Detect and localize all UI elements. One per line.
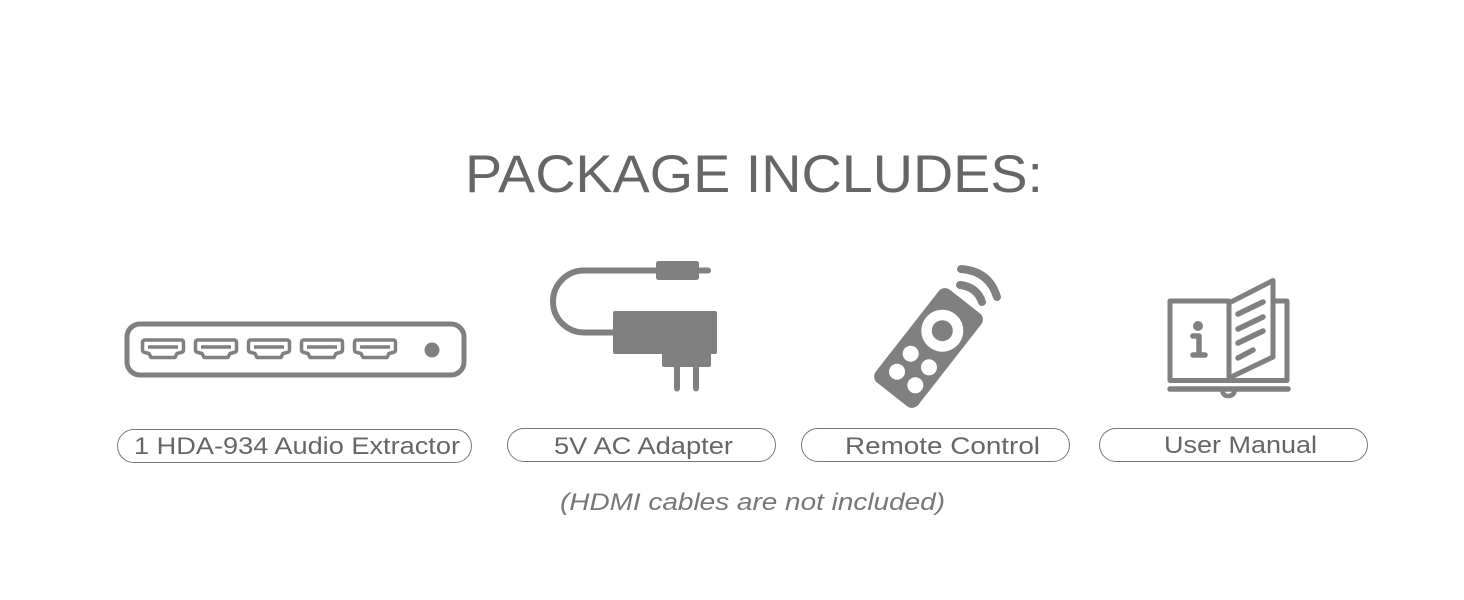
title: PACKAGE INCLUDES: bbox=[465, 145, 1043, 204]
label: remote control bbox=[802, 428, 1070, 462]
icon: audio extractor bbox=[127, 324, 464, 375]
icon: AC adapter bbox=[553, 261, 717, 388]
label: AC adapter bbox=[508, 428, 776, 462]
label: audio extractor: 1 HDA-934 Audio Extractor bbox=[134, 433, 460, 460]
label: remote control: Remote Control bbox=[845, 433, 1040, 460]
label: user manual: User Manual bbox=[1164, 432, 1317, 459]
icon: remote control bbox=[871, 269, 997, 411]
icon: user manual bbox=[1170, 280, 1288, 396]
info symbol bbox=[1193, 321, 1205, 355]
label: AC adapter: 5V AC Adapter bbox=[554, 433, 733, 460]
HDMI ports bbox=[142, 340, 396, 358]
label: user manual bbox=[1100, 428, 1368, 462]
note: (HDMI cables are not included) bbox=[560, 489, 945, 516]
label: audio extractor bbox=[118, 430, 472, 462]
